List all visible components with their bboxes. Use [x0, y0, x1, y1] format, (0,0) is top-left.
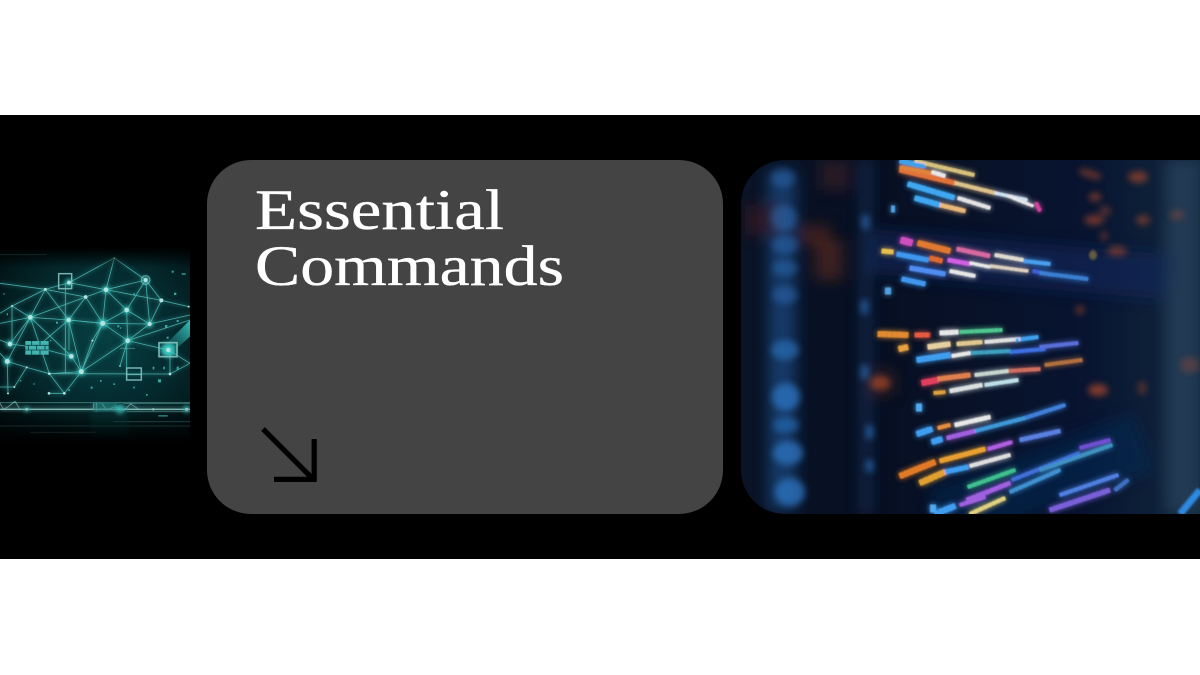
code lines: middle block [882, 240, 1088, 294]
blurred orange blobs [870, 166, 1200, 396]
small data dots [3, 271, 186, 417]
square outlines [59, 274, 177, 380]
image: blurred code screen [741, 160, 1200, 546]
brick icon [25, 341, 49, 355]
icon: diagonal arrow [263, 429, 314, 480]
black band [0, 115, 1200, 559]
image: teal network graph [0, 248, 190, 443]
blurred blue column blobs [771, 169, 873, 506]
node glows [3, 277, 190, 414]
code lines: top block [893, 161, 1040, 212]
panel: title card [207, 160, 723, 514]
blurred background columns [745, 160, 1200, 546]
nodes [5, 257, 190, 411]
waveform line [0, 401, 190, 412]
code lines: lower blocks [878, 330, 1128, 514]
title: Commands [255, 235, 564, 298]
title: Essential [255, 179, 504, 242]
